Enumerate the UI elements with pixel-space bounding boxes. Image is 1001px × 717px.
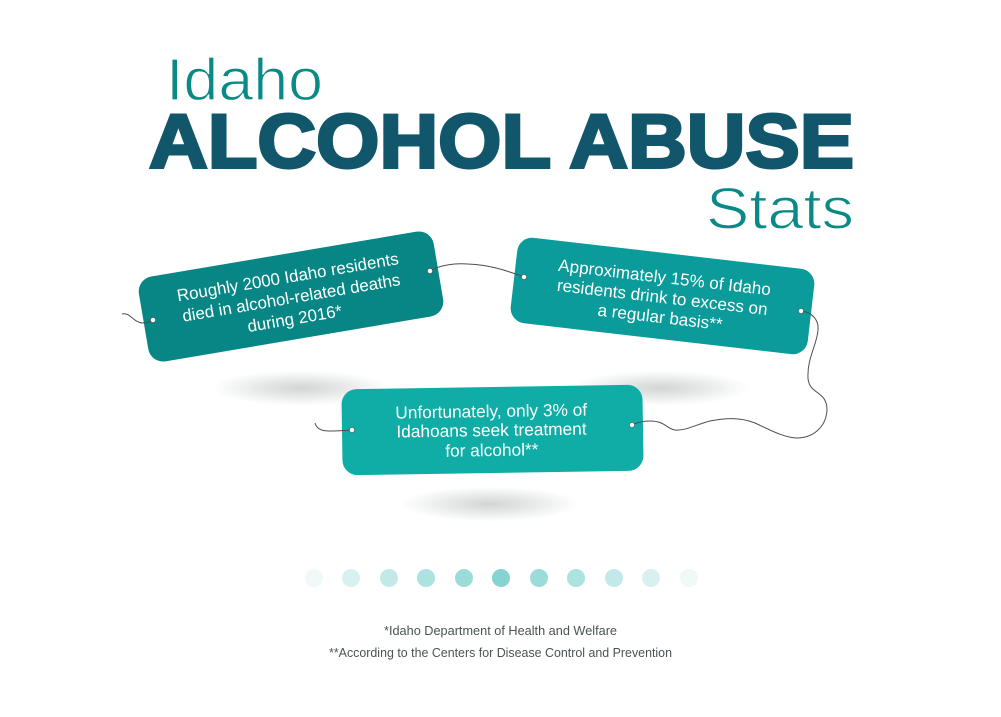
- string: left of tag 1: [122, 314, 153, 323]
- string: tag 1 to tag 2: [430, 264, 524, 277]
- title: ALCOHOL ABUSE: ALCOHOL ABUSE: [149, 100, 854, 184]
- footnote 1: *Idaho Department of Health and Welfare: [384, 623, 617, 638]
- tag 1 text: Roughly 2000 Idaho residents: [176, 249, 400, 305]
- shadow under tag 3: [401, 486, 579, 522]
- tag 1 text: during 2016*: [246, 301, 344, 336]
- footnotes: [329, 623, 672, 660]
- string: left of tag 3: [315, 423, 352, 431]
- tag 2: 15% drink to excess: [509, 236, 816, 356]
- footnote 2: **According to the Centers for Disease Control and Prevention: [329, 645, 672, 660]
- title: [149, 47, 854, 242]
- tag 3: 3% seek treatment: [341, 385, 644, 475]
- shadow under tag 2: [572, 370, 750, 406]
- tag 2 text: Approximately 15% of Idaho: [557, 256, 772, 299]
- tag 3 text: Idahoans seek treatment: [396, 419, 587, 442]
- tag 1 text: died in alcohol-related deaths: [181, 270, 402, 326]
- tag 2 text: a regular basis**: [597, 301, 724, 334]
- dot row: [305, 569, 698, 587]
- title: Idaho: Idaho: [166, 47, 323, 113]
- string: tag 2 to tag 3: [631, 311, 827, 438]
- tag 1: 2000 deaths: [136, 229, 446, 364]
- tag holes: [150, 268, 804, 433]
- string connecting tags: [122, 264, 827, 438]
- tag 3 text: for alcohol**: [445, 439, 539, 461]
- tag 3 text: Unfortunately, only 3% of: [395, 400, 587, 423]
- tag 2 text: residents drink to excess on: [556, 276, 769, 319]
- shadow under tag 1: [212, 370, 390, 406]
- title: Stats: Stats: [706, 176, 854, 242]
